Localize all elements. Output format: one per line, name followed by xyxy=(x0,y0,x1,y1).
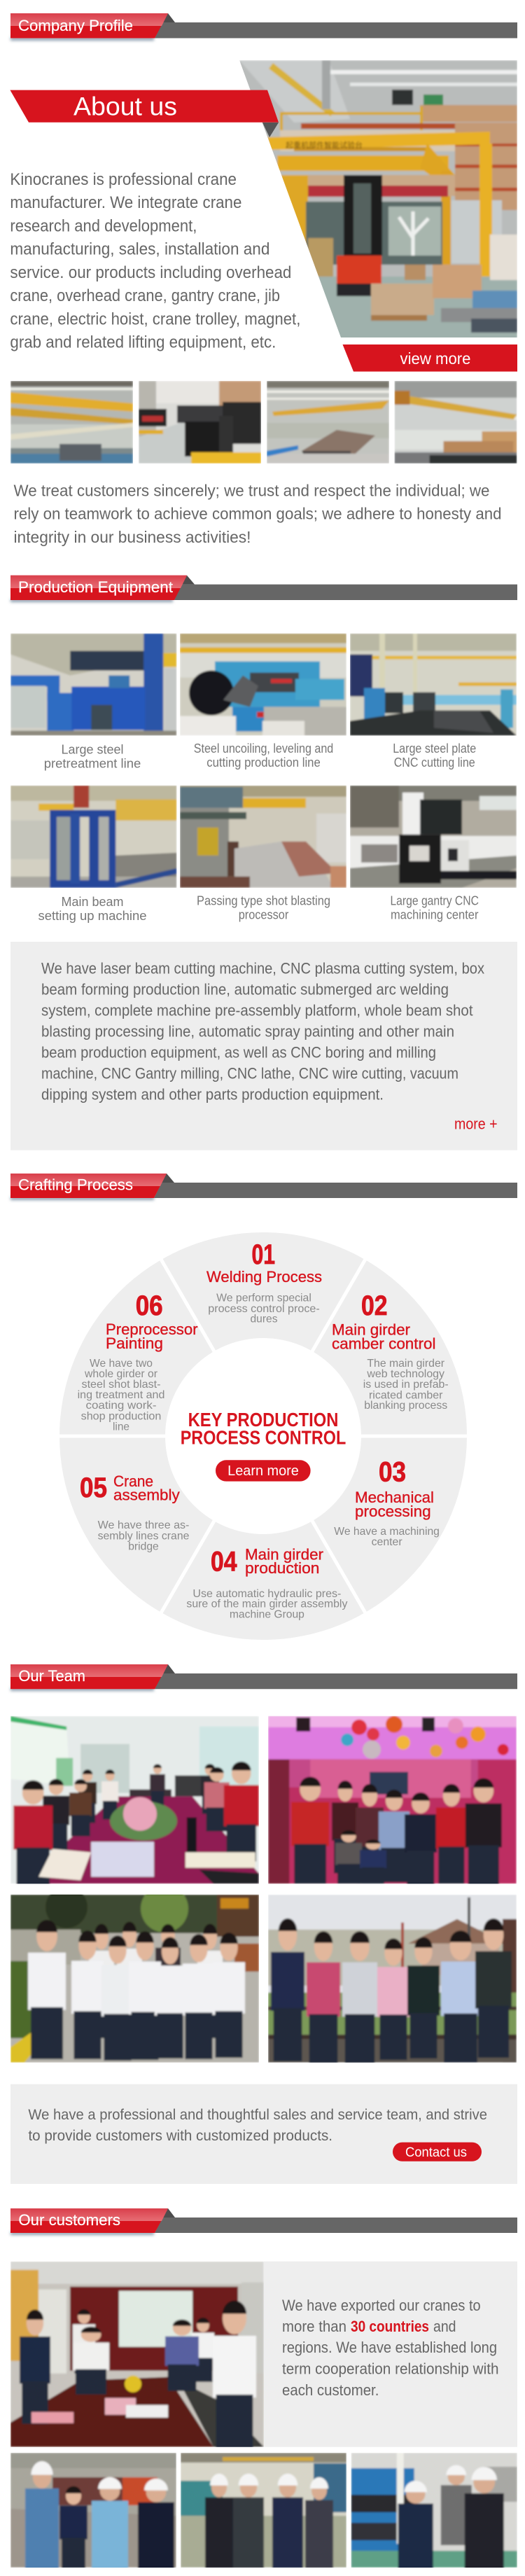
panel: equipment description: beam production equipment, as well as CNC boring and milling xyxy=(41,1044,436,1061)
step 02: main girder camber control: camber control xyxy=(332,1335,435,1353)
step 02: main girder camber control: ricated camber xyxy=(369,1389,443,1401)
section banner: Our Team xyxy=(10,1664,517,1691)
photo: yellow overhead crane 1 xyxy=(10,381,133,464)
step 04: main girder production: machine Group xyxy=(230,1609,304,1621)
step 02: main girder camber control: web technology xyxy=(366,1368,444,1380)
step 06: preprocessor painting: We have two xyxy=(90,1358,153,1370)
wheel centre: key production process control: KEY PRODUCTION xyxy=(188,1409,338,1430)
step 01: welding process: 01 xyxy=(252,1239,275,1270)
photo: blue pretreatment line xyxy=(10,633,176,736)
photo: customer meeting xyxy=(10,2262,264,2447)
captions: equipment row 1 xyxy=(44,742,476,771)
photo: team party xyxy=(268,1715,517,1884)
panel: customers description xyxy=(264,2262,517,2447)
captions: equipment row 1: pretreatment line xyxy=(44,757,141,771)
chart: six-step process wheel xyxy=(56,1232,470,1640)
photo: hoist production floor xyxy=(139,381,261,464)
photo: crane test platform with yellow gantry: 起重机部件智能试验台 xyxy=(286,140,363,150)
captions: equipment row 2: processor xyxy=(239,907,288,921)
step 06: preprocessor painting xyxy=(78,1290,197,1433)
step 05: crane assembly: Crane xyxy=(113,1473,153,1490)
panel: team description xyxy=(10,2084,517,2184)
captions: equipment row 2 xyxy=(38,893,479,923)
step 05: crane assembly xyxy=(80,1473,190,1552)
panel: equipment description: more + xyxy=(454,1115,498,1133)
wheel centre: key production process control: Learn more xyxy=(227,1463,299,1479)
text block: about paragraph: crane, overhead crane, gantry crane, jib xyxy=(10,286,280,305)
step 01: welding process: dures xyxy=(251,1313,277,1325)
step 03: mechanical processing xyxy=(334,1457,440,1548)
step 06: preprocessor painting: steel shot blast- xyxy=(81,1379,161,1391)
section banner: Production Equipment: Production Equipment xyxy=(18,578,173,596)
step 01: welding process: Welding Process xyxy=(206,1268,322,1286)
step 05: crane assembly: bridge xyxy=(128,1540,159,1552)
captions: equipment row 1: cutting production line xyxy=(206,756,321,770)
step 05: crane assembly: assembly xyxy=(113,1487,180,1504)
text block: about paragraph: manufacturing, sales, installation and xyxy=(10,240,270,259)
section banner: Our customers: Our customers xyxy=(18,2211,120,2229)
panel: team description: to provide customers with customized products. xyxy=(28,2127,332,2144)
step 03: mechanical processing: processing xyxy=(355,1503,431,1520)
step 06: preprocessor painting: whole girder or xyxy=(84,1368,158,1380)
captions: equipment row 2: machining center xyxy=(391,907,478,921)
captions: equipment row 1: Large steel xyxy=(62,743,123,757)
panel: customers description: 30 countries xyxy=(351,2318,429,2335)
text block: values statement: rely on teamwork to achieve common goals; we adhere to honesty and xyxy=(14,505,501,523)
photo: factory visit 3 xyxy=(351,2453,517,2568)
photo: steel plate CNC cutting line xyxy=(350,633,517,736)
panel: customers description: term cooperation relationship with xyxy=(282,2360,498,2378)
step 02: main girder camber control: is used in prefab- xyxy=(363,1379,449,1391)
step 05: crane assembly: 05 xyxy=(80,1473,107,1503)
panel: customers description: and xyxy=(433,2318,456,2335)
photo: factory visit 2 xyxy=(181,2453,346,2568)
step 04: main girder production: 04 xyxy=(211,1547,237,1578)
text block: values statement: integrity in our business activities! xyxy=(14,528,251,546)
captions: equipment row 2: Large gantry CNC xyxy=(390,893,479,907)
panel: equipment description xyxy=(10,942,517,1150)
step 02: main girder camber control: 02 xyxy=(361,1290,388,1321)
step 01: welding process: process control proce- xyxy=(208,1303,320,1315)
panel: equipment description: system, complete machine pre-assembly platform, whole beam shot xyxy=(41,1002,473,1019)
step 03: mechanical processing: We have a machining xyxy=(334,1526,440,1538)
step 04: main girder production: sure of the main girder assembly xyxy=(186,1599,347,1610)
step 06: preprocessor painting: shop production xyxy=(81,1411,161,1423)
text block: about paragraph: service. our products including overhead xyxy=(10,263,291,282)
panel: equipment description: beam forming production line, automatic submerged arc welding xyxy=(41,981,449,998)
photo: team meeting xyxy=(10,1715,259,1884)
step 06: preprocessor painting: ing treatment and xyxy=(78,1389,164,1401)
button: view more xyxy=(343,344,517,372)
text block: values statement: We treat customers sincerely; we trust and respect the individual; we xyxy=(14,481,490,499)
section banner: Our Team: Our Team xyxy=(18,1667,85,1685)
photo: crane test platform with yellow gantry xyxy=(239,60,517,340)
step 05: crane assembly: sembly lines crane xyxy=(98,1530,190,1542)
section banner: Our customers xyxy=(10,2208,517,2235)
photo: gantry CNC machining center xyxy=(350,786,517,888)
wheel centre: key production process control xyxy=(181,1409,346,1482)
text block: about paragraph: Kinocranes is professional crane xyxy=(10,170,237,189)
step 04: main girder production: production xyxy=(245,1559,319,1577)
photo: steel uncoiling line xyxy=(180,633,346,736)
step 04: main girder production: Use automatic hydraulic pres- xyxy=(192,1588,341,1600)
section banner: Crafting Process: Crafting Process xyxy=(18,1176,133,1193)
step 05: crane assembly: We have three as- xyxy=(98,1519,189,1531)
step 06: preprocessor painting: Painting xyxy=(106,1335,163,1352)
step 06: preprocessor painting: coating work- xyxy=(85,1400,157,1412)
step 03: mechanical processing: center xyxy=(372,1536,402,1548)
step 03: mechanical processing: 03 xyxy=(379,1457,406,1488)
text block: values statement xyxy=(14,481,501,546)
panel: equipment description: dipping system and other parts production equipment. xyxy=(41,1086,384,1103)
banner: About us: About us xyxy=(74,92,177,120)
panel: equipment description: We have laser beam cutting machine, CNC plasma cutting system, box xyxy=(41,960,484,977)
step 02: main girder camber control: Main girder xyxy=(332,1321,410,1339)
step 02: main girder camber control: The main girder xyxy=(367,1358,445,1370)
photo: team outing in white shirts xyxy=(10,1895,259,2063)
section banner: Crafting Process xyxy=(10,1174,517,1200)
button: view more: view more xyxy=(400,349,470,368)
wheel centre: key production process control: PROCESS CONTROL xyxy=(181,1427,346,1449)
text block: about paragraph: research and development, xyxy=(10,217,197,235)
step 01: welding process: We perform special xyxy=(216,1292,312,1304)
step 04: main girder production: Main girder xyxy=(245,1546,323,1563)
step 02: main girder camber control: blanking process xyxy=(364,1400,447,1412)
photo: main beam setting up machine xyxy=(10,786,176,888)
photo: crane and parts shelving xyxy=(395,381,517,464)
step 06: preprocessor painting: line xyxy=(113,1421,130,1433)
panel: equipment description: machine, CNC Gantry milling, CNC lathe, CNC wire cutting, vacuum xyxy=(41,1065,458,1082)
photo: team by the waterfront xyxy=(268,1895,517,2063)
captions: equipment row 2: setting up machine xyxy=(38,909,147,923)
panel: team description: We have a professional and thoughtful sales and service team, and strive xyxy=(28,2106,487,2123)
text block: about paragraph xyxy=(10,170,300,352)
step 04: main girder production xyxy=(186,1546,347,1621)
step 02: main girder camber control xyxy=(332,1290,449,1412)
text block: about paragraph: crane, electric hoist, crane trolley, magnet, xyxy=(10,309,300,329)
panel: customers description: We have exported our cranes to xyxy=(282,2297,481,2314)
captions: equipment row 1: Steel uncoiling, leveling and xyxy=(194,742,333,756)
section banner: Production Equipment xyxy=(10,576,517,602)
panel: customers description: regions. We have established long xyxy=(282,2339,497,2356)
panel: customers description: each customer. xyxy=(282,2381,379,2399)
step 03: mechanical processing: Mechanical xyxy=(355,1489,434,1506)
captions: equipment row 1: Large steel plate xyxy=(393,742,476,756)
photo: factory visit 1 xyxy=(10,2453,176,2568)
photo: box girder under crane xyxy=(267,381,389,464)
panel: equipment description: blasting processing line, automatic spray painting and other main xyxy=(41,1023,454,1040)
button: contact us xyxy=(393,2143,482,2161)
section banner: Company Profile xyxy=(10,13,517,41)
text block: about paragraph: grab and related lifting equipment, etc. xyxy=(10,333,276,352)
photo: shot blasting processor xyxy=(180,786,346,888)
section banner: Company Profile: Company Profile xyxy=(18,17,133,34)
captions: equipment row 1: CNC cutting line xyxy=(394,756,475,770)
text block: about paragraph: manufacturer. We integrate crane xyxy=(10,193,241,212)
button: contact us: Contact us xyxy=(405,2145,467,2160)
captions: equipment row 2: Passing type shot blasting xyxy=(197,893,330,907)
step 06: preprocessor painting: Preprocessor xyxy=(106,1321,197,1338)
banner: About us xyxy=(10,90,279,137)
captions: equipment row 2: Main beam xyxy=(62,895,123,909)
step 01: welding process xyxy=(206,1239,322,1325)
panel: customers description: more than xyxy=(282,2318,346,2335)
step 06: preprocessor painting: 06 xyxy=(136,1290,163,1321)
